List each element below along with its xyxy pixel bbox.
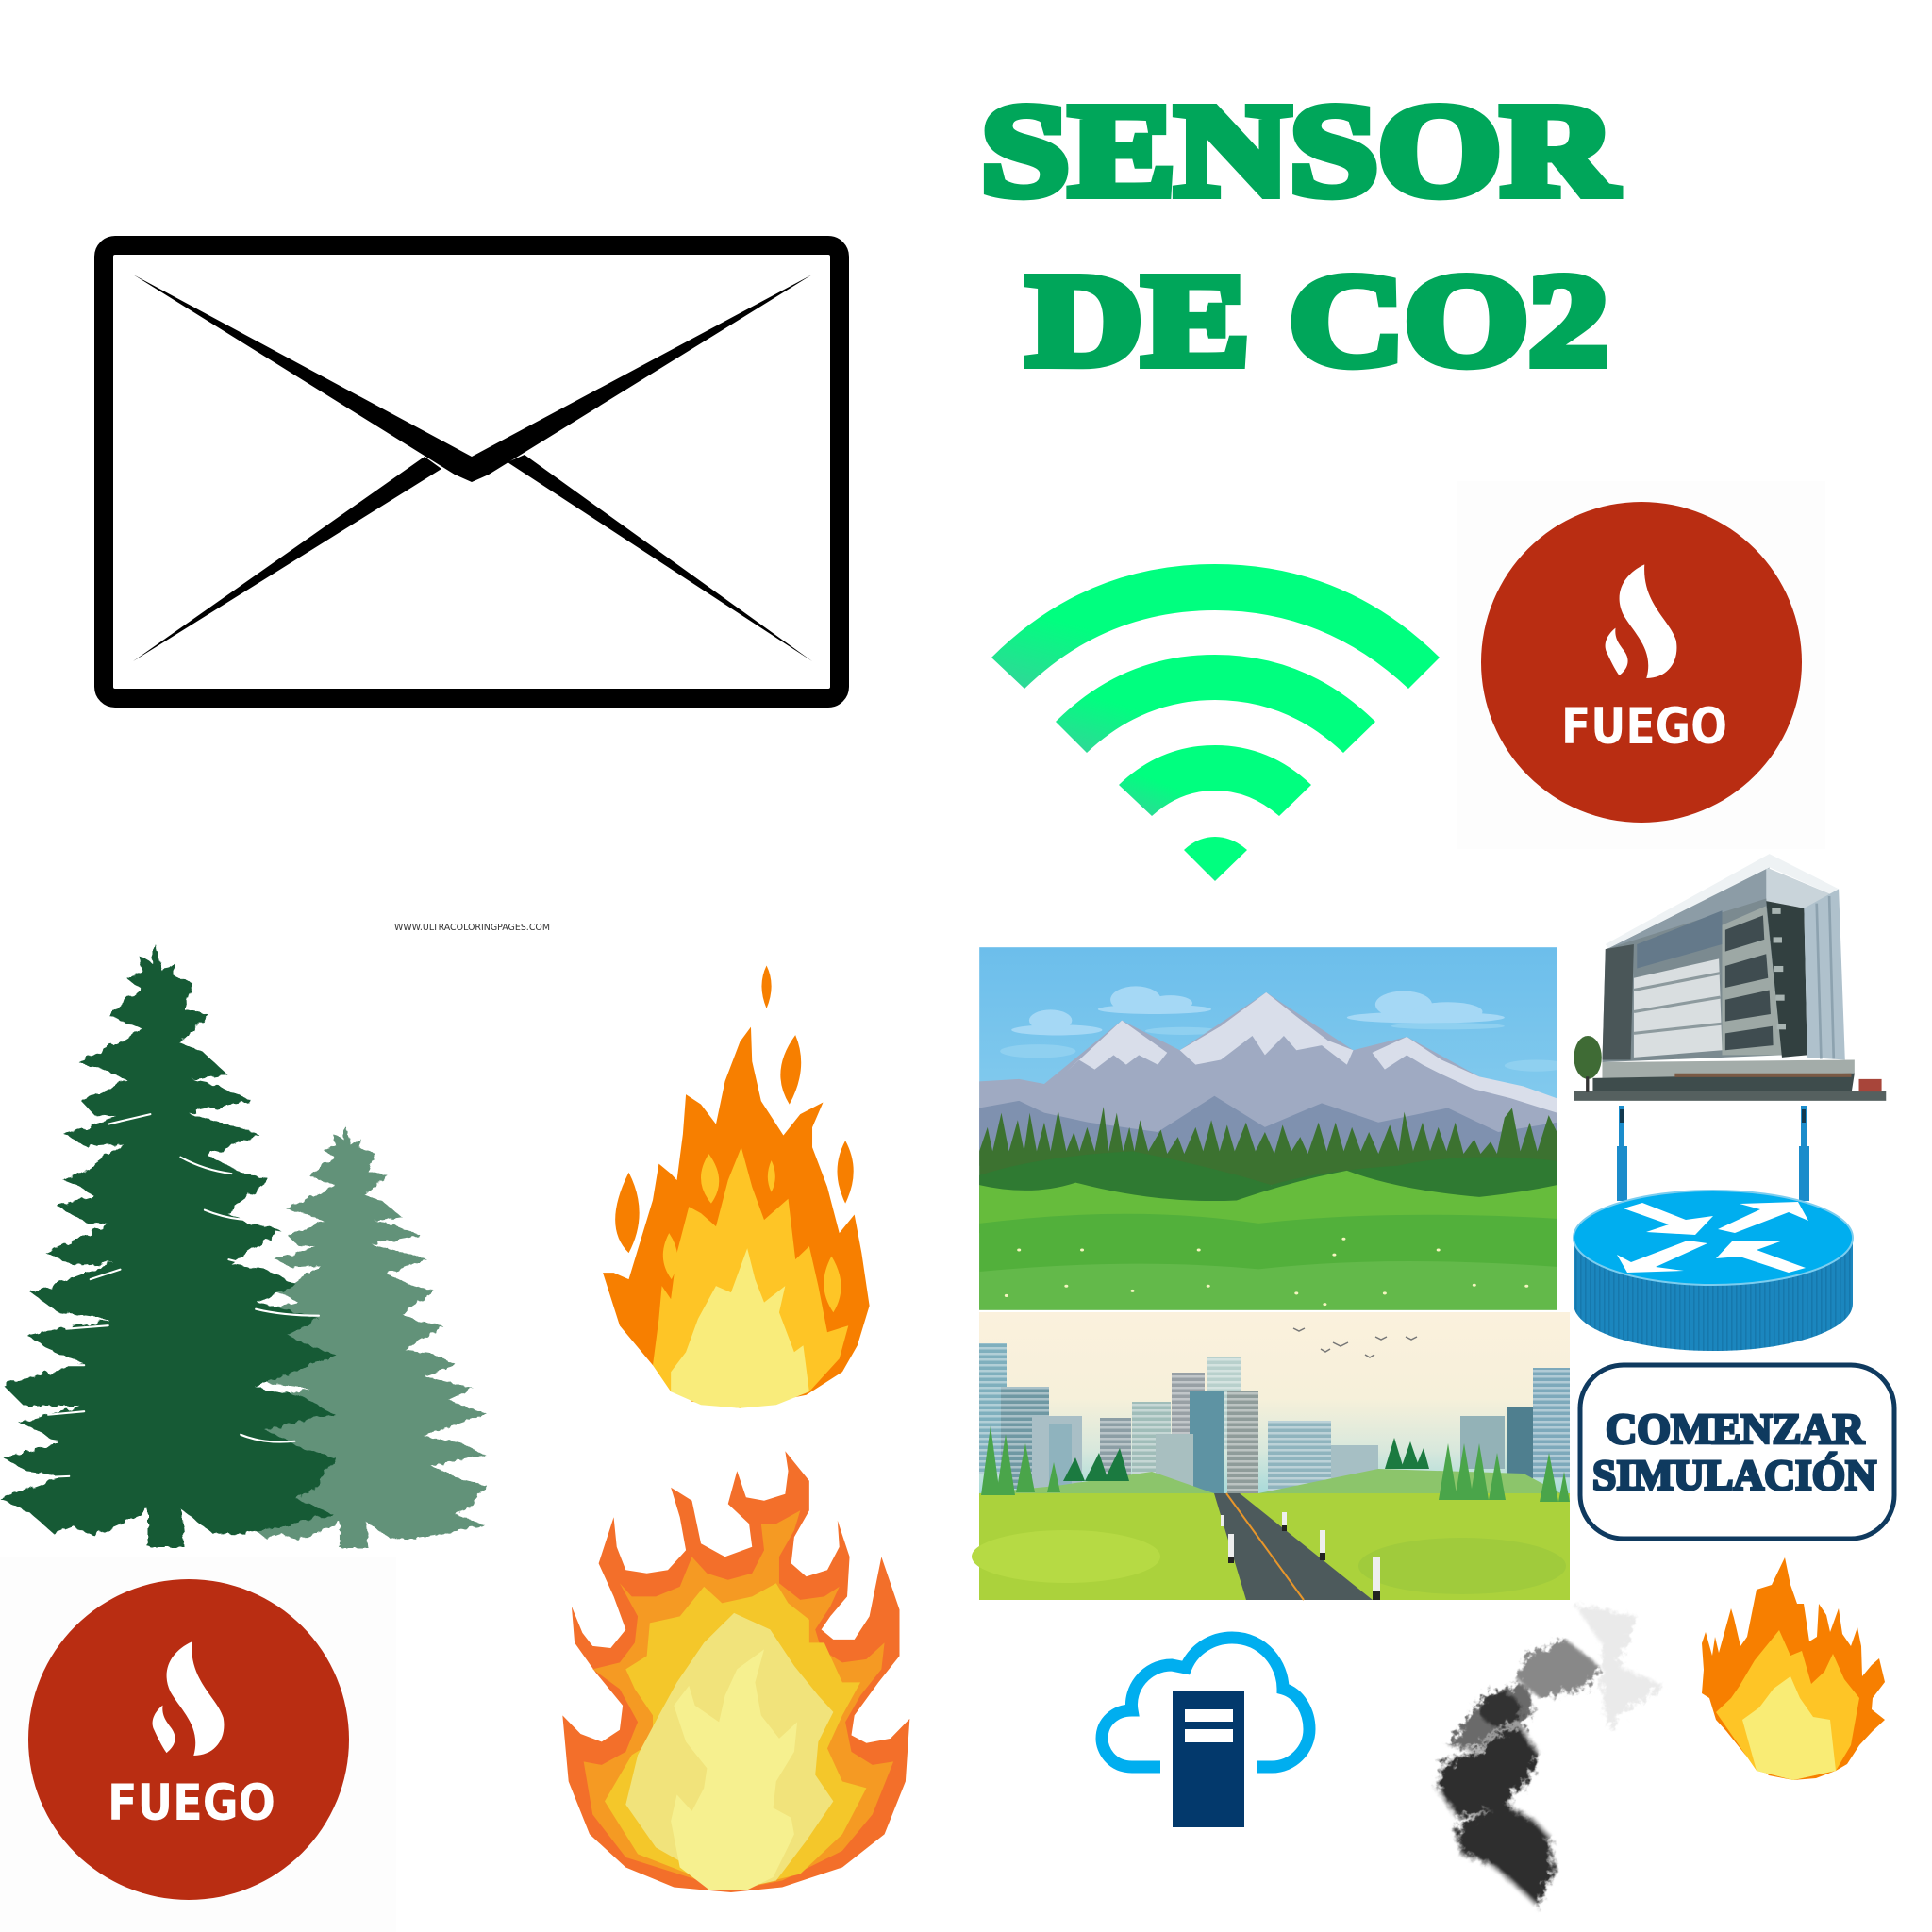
button: comenzar simulación [1580, 1365, 1894, 1539]
icon: flame upper [603, 966, 870, 1408]
button: comenzar simulación: COMENZAR [1606, 1406, 1865, 1453]
icon: cloud server [1102, 1638, 1309, 1827]
icon: envelope [104, 245, 840, 698]
icon: dark pine tree [0, 945, 337, 1547]
icon: fuego badge bottom: FUEGO [108, 1774, 275, 1832]
image: mountain landscape [979, 947, 1568, 1310]
icon: flame lower [562, 1451, 909, 1892]
icon: light pine tree [225, 1126, 487, 1548]
icon: router [1574, 1106, 1853, 1351]
title: DE CO2 [1027, 248, 1608, 393]
image: apartment building [1574, 854, 1886, 1101]
icon: fuego badge bottom [0, 1557, 396, 1932]
title [981, 78, 1618, 393]
text: watermark url: WWW.ULTRACOLORINGPAGES.COM [394, 923, 550, 933]
icon: small flame [1702, 1557, 1885, 1780]
image: city landscape [972, 1312, 1570, 1600]
icon: fuego badge top [1457, 481, 1825, 849]
icon: smoke plume [1439, 1604, 1665, 1904]
icon: wifi signal [991, 564, 1440, 881]
icon: fuego badge top: FUEGO [1561, 698, 1727, 756]
button: comenzar simulación: SIMULACIÓN [1592, 1452, 1876, 1499]
title: SENSOR [981, 78, 1618, 224]
